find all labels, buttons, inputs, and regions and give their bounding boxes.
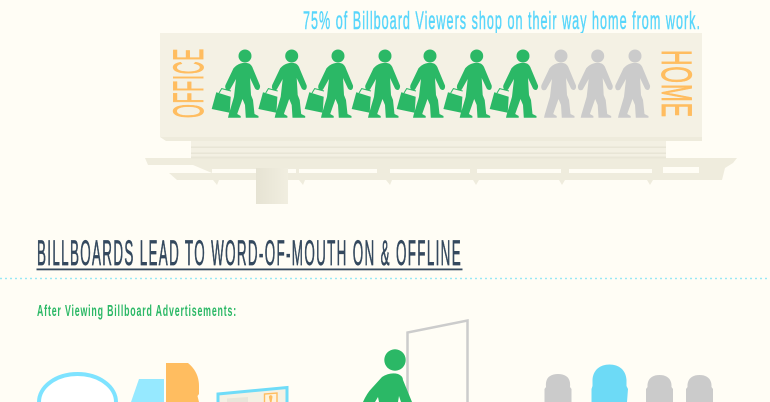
seven green shoppers with bags <box>212 50 538 118</box>
icon: light blue shape <box>131 379 164 402</box>
icon: speech bubble <box>39 374 116 402</box>
billboard slats <box>191 141 666 158</box>
three gray walkers without bags <box>541 50 650 118</box>
icon: orange silhouette <box>166 363 199 402</box>
billboard supports and platform <box>145 158 737 204</box>
icon: group of heads <box>544 364 713 402</box>
billboard panel <box>160 33 702 137</box>
icon: envelope card <box>218 388 287 402</box>
billboard structure <box>145 33 737 204</box>
icon: person walking through door <box>363 349 412 402</box>
icon: open door <box>408 320 468 402</box>
infographic canvas: HOME <box>652 50 700 118</box>
subheading: After Viewing Billboard Advertisements: <box>37 303 237 320</box>
billboard bottom edge <box>160 137 702 141</box>
